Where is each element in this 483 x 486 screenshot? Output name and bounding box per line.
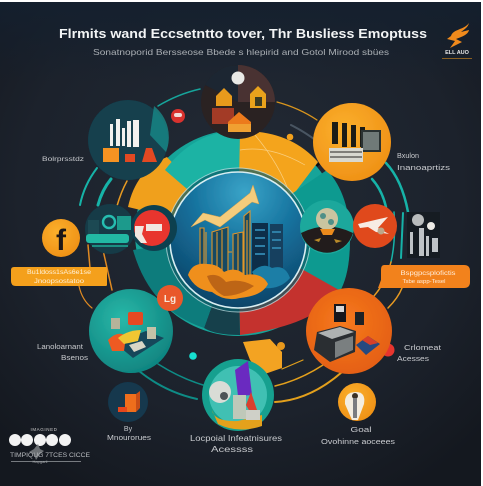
bottom right orange circle: machine: [306, 288, 392, 374]
right red circle: [353, 204, 397, 248]
small teal dot: [189, 352, 197, 360]
label: bottom center: Locpoial Infeatnisures: [190, 434, 282, 443]
dark towers: [252, 223, 283, 275]
central glass disc: [166, 168, 310, 312]
right orange banner: Bspgpcsplofictis: [400, 270, 456, 277]
label: bottom right: [321, 427, 396, 446]
small orange dot: [277, 342, 285, 350]
wedge: right teal: [238, 170, 350, 293]
bottom center teal circle: gears and figure: [202, 359, 274, 431]
subtitle: Sonatnoporid Bersseose Bbede s hlepirid and Gotol Mirood sbües: [93, 47, 389, 57]
label: bottom left small: Mnourorues: [107, 435, 152, 442]
right chart panel: [407, 212, 440, 258]
watermark logo: TIMPIQUG 7TCES CICCE: [10, 453, 90, 459]
small orange badge: [157, 285, 183, 311]
left orange banner: Bu1ldoss1sAs6e1se: [27, 269, 91, 276]
label: left lower: Lanoloarnant: [37, 344, 83, 351]
wedge: top teal: [165, 131, 240, 233]
central wheel: [128, 130, 350, 336]
right orange banner: Tsbe aspp-Tesel: [402, 279, 446, 285]
label: top right: Inanoaprtizs: [397, 165, 451, 172]
left orange banner: Jnoopsostatoo: [34, 279, 85, 285]
right orange banner: [378, 265, 470, 288]
watermark logo: Hapgaril: [33, 459, 48, 464]
label: bottom center: [190, 434, 282, 454]
amber wedge highlights: [240, 135, 305, 195]
watermark logo: IMAGINED: [30, 427, 58, 432]
left orange banner: [11, 267, 107, 286]
small orange badge: Lg: [164, 294, 176, 305]
logo: [442, 23, 472, 59]
small amber dot: [287, 134, 293, 140]
rising arrow: [191, 185, 259, 227]
label: bottom right: Ovohinne aoceees: [321, 439, 396, 446]
small red dot top-left: [171, 109, 185, 123]
label: left lower: [37, 344, 89, 362]
facebook icon: [42, 219, 80, 257]
orange lower right shape: [243, 339, 282, 375]
wedge: left lower: [133, 233, 238, 328]
small red ball: [382, 344, 394, 356]
top circle: buildings: [201, 65, 275, 139]
orange line skyline: [200, 211, 250, 289]
orange cloud: [188, 264, 268, 299]
label: bottom left small: [107, 426, 152, 442]
label: top right: [397, 153, 451, 172]
blue cloud: [252, 266, 290, 288]
label: right lower: Crlomeat: [404, 345, 441, 352]
top-right circle: server and screen: [313, 103, 391, 181]
wedge: bottom dark teal: [204, 233, 240, 335]
label: top left: Bolrprsstdz: [42, 156, 85, 163]
left teal circle: device: [85, 204, 135, 254]
wedge: top amber: [238, 131, 318, 233]
logo: ELL AUO: [445, 50, 470, 56]
label: bottom right: Goal: [350, 427, 372, 434]
bottom-left teal circle: desk scene: [89, 289, 173, 373]
title: Flrmits wand Eccsetntto tover, Thr Busliess Emoptuss: [59, 26, 427, 41]
wedge: left orange: [128, 157, 238, 233]
right globe circle: [300, 200, 354, 254]
watermark logo: [9, 427, 90, 464]
label: right lower: [397, 345, 441, 363]
small bulb circle: [338, 383, 376, 421]
top-left circle: bar chart: [88, 100, 169, 180]
facebook icon: f: [56, 224, 67, 257]
label: bottom center: Acessss: [211, 445, 253, 454]
orbit arcs and connectors: [79, 89, 408, 402]
label: left lower: Bsenos: [61, 355, 89, 362]
small blue circle: orange blocks: [108, 382, 148, 422]
wedge: red: [238, 233, 339, 335]
label: top right: Bxulon: [397, 153, 419, 160]
left red circle: [131, 205, 177, 251]
label: right lower: Acesses: [397, 356, 430, 363]
label: bottom left small: By: [124, 426, 133, 433]
